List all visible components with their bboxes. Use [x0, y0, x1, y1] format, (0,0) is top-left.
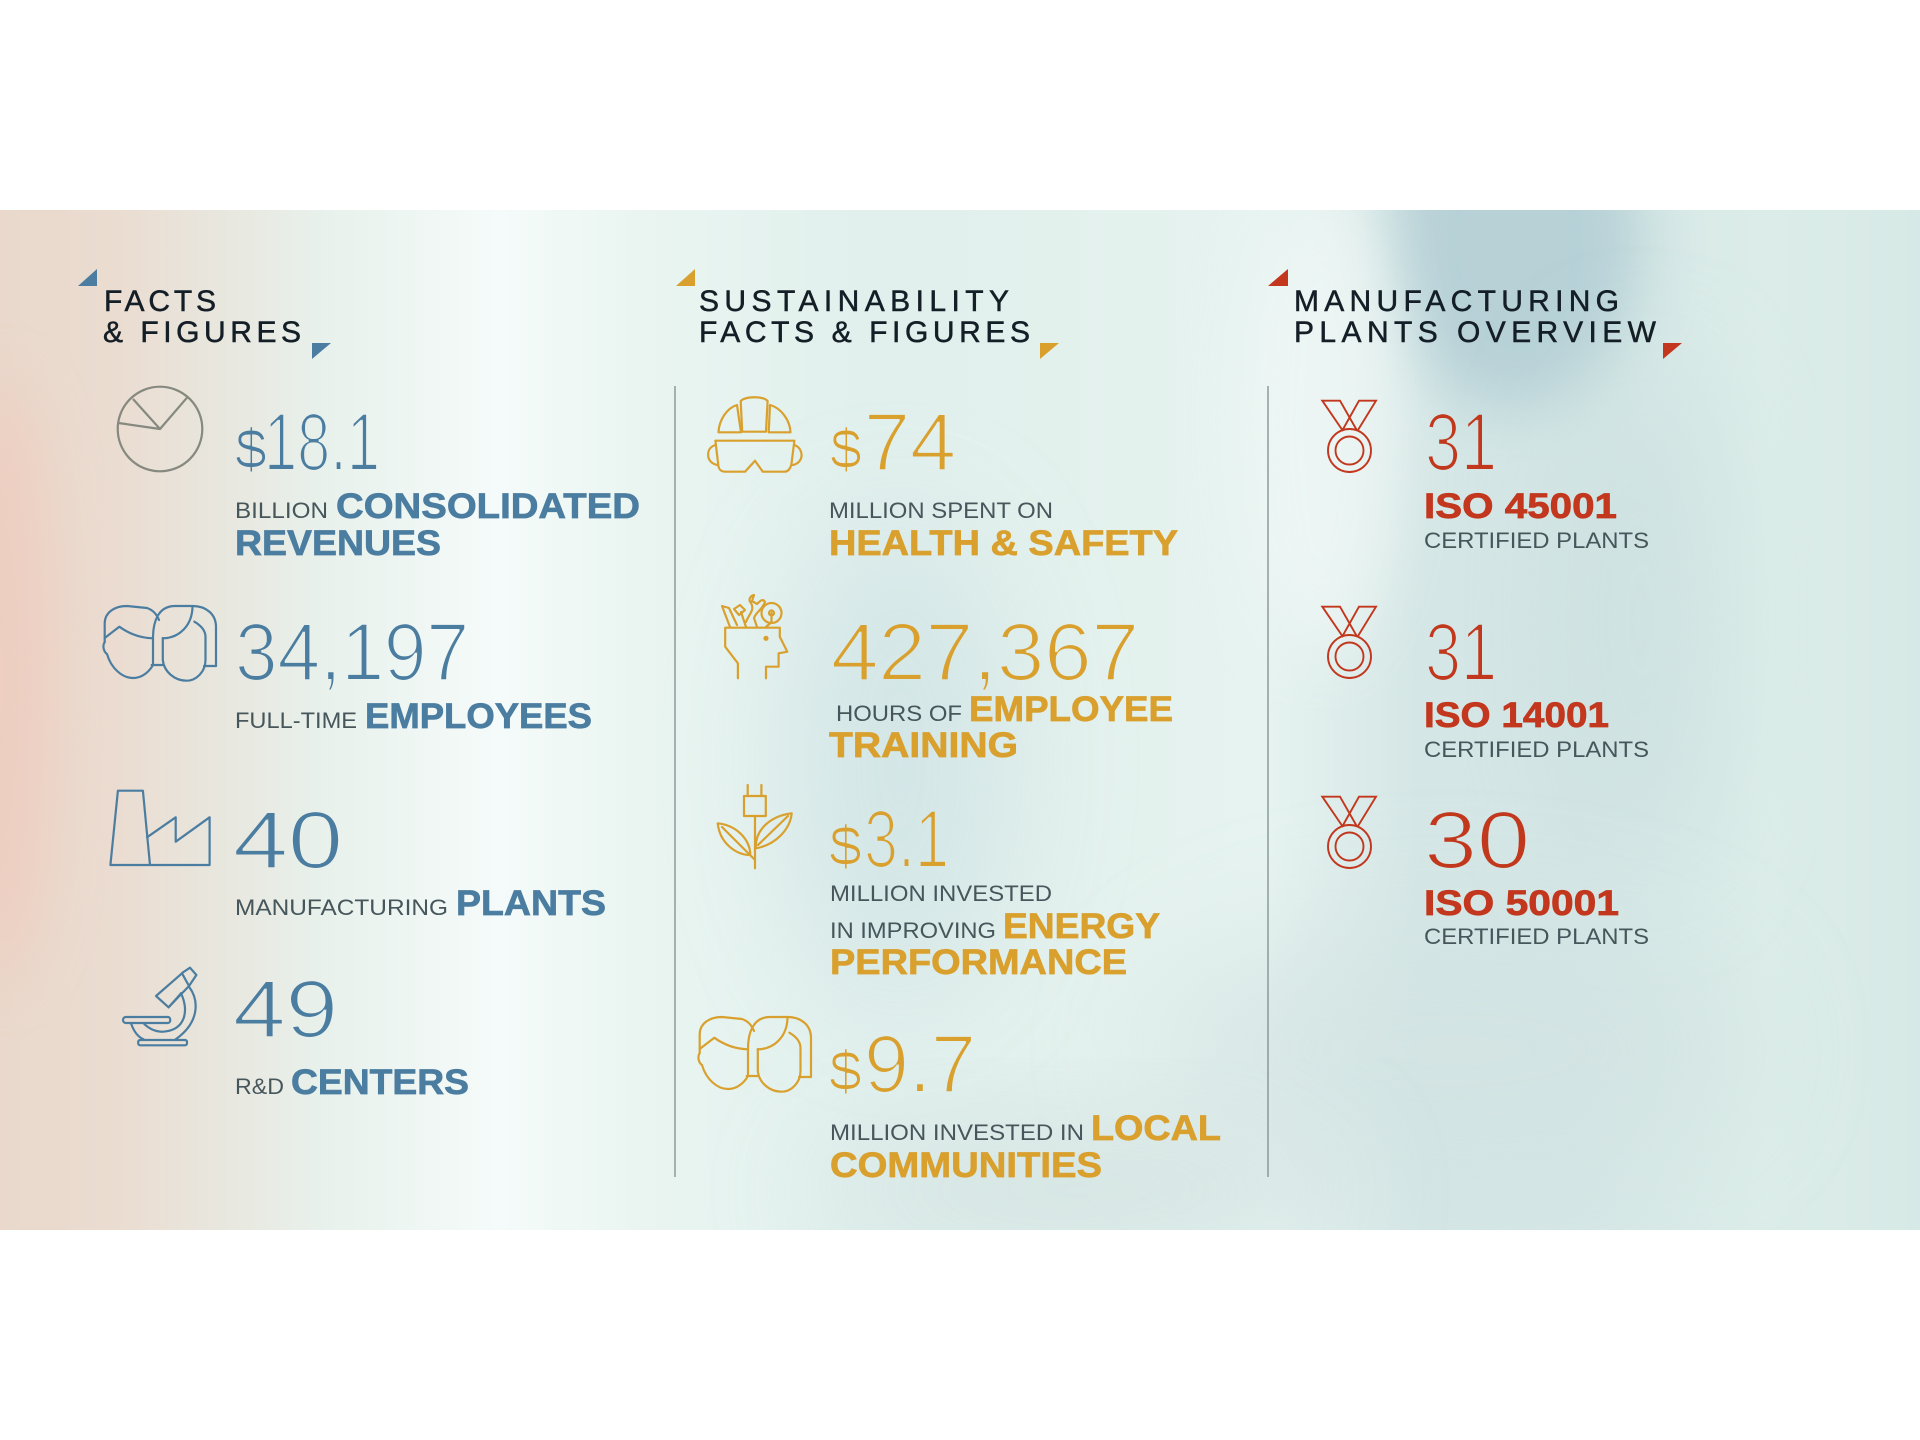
stat: energy performance: PERFORMANCE: [830, 943, 1127, 982]
stat: health and safety: [829, 397, 1178, 563]
heading: facts and figures: & FIGURES: [103, 316, 301, 349]
icon: plant with plug: [718, 785, 792, 868]
heading: facts and figures: FACTS: [104, 285, 216, 318]
stat: revenues: BILLION: [235, 498, 328, 523]
stat: energy performance: IN IMPROVING: [830, 918, 996, 943]
stat: ISO 50001: CERTIFIED PLANTS: [1424, 924, 1649, 949]
stat: employee training: [829, 607, 1173, 765]
stat: revenues: [235, 397, 640, 563]
icon: employees faces: [103, 606, 216, 681]
divider: column one and two: [674, 386, 676, 1177]
stat: local communities: $: [829, 1040, 862, 1102]
heading: manufacturing plants overview: MANUFACTURING: [1294, 285, 1619, 318]
stat: energy performance: MILLION INVESTED: [830, 881, 1052, 906]
stat: plants: MANUFACTURING: [235, 895, 448, 920]
stat: health and safety: 74: [864, 397, 956, 488]
heading: manufacturing plants overview: PLANTS OVERVIEW: [1294, 316, 1657, 349]
stat: employees: [235, 607, 592, 736]
stat: revenues: CONSOLIDATED: [336, 487, 640, 526]
stat: ISO 45001: CERTIFIED PLANTS: [1424, 528, 1649, 553]
stat: employees: 34,197: [235, 607, 469, 698]
stat: research centers: [233, 964, 469, 1102]
icon: pie chart: [118, 387, 202, 471]
icon: head with tools: [722, 595, 787, 678]
icon: community faces: [698, 1017, 811, 1092]
heading: sustainability: [676, 269, 1059, 359]
stat: local communities: 9.7: [864, 1019, 976, 1110]
stat: revenues: 18.1: [264, 397, 380, 488]
stat: research centers: R&D: [235, 1074, 284, 1099]
icon: medal one: [1322, 401, 1376, 472]
panel: manufacturing plants overview: [1268, 269, 1682, 949]
background band: [0, 210, 1920, 1230]
stat: energy performance: 3.1: [864, 794, 949, 885]
stat: local communities: [829, 1019, 1221, 1185]
stat: ISO 45001: ISO 45001: [1424, 487, 1617, 526]
stat: local communities: LOCAL: [1091, 1109, 1221, 1148]
stat: ISO 14001: ISO 14001: [1424, 696, 1609, 735]
stat: revenues: $: [235, 418, 267, 480]
stat: employee training: HOURS OF: [836, 701, 962, 726]
heading: sustainability: FACTS & FIGURES: [699, 316, 1030, 349]
stat: employees: EMPLOYEES: [365, 697, 592, 736]
stat: energy performance: [829, 794, 1160, 982]
stat: local communities: MILLION INVESTED IN: [830, 1120, 1084, 1145]
heading: sustainability: SUSTAINABILITY: [699, 285, 1009, 318]
stat: ISO 14001: 31: [1425, 607, 1497, 698]
icon: medal three: [1322, 797, 1376, 868]
divider: column two and three: [1267, 386, 1269, 1177]
stat: employee training: EMPLOYEE: [969, 690, 1173, 729]
stat: plants: 40: [233, 795, 343, 886]
stat: health and safety: MILLION SPENT ON: [829, 498, 1053, 523]
stat: ISO 50001: 30: [1424, 795, 1530, 886]
stat: health and safety: HEALTH & SAFETY: [829, 524, 1178, 563]
icon: microscope: [123, 968, 196, 1045]
stat: energy performance: ENERGY: [1003, 907, 1160, 946]
heading: manufacturing plants overview: [1268, 269, 1682, 359]
stat: ISO 45001: [1424, 397, 1649, 553]
stat: employees: FULL-TIME: [235, 708, 357, 733]
stat: ISO 14001: CERTIFIED PLANTS: [1424, 737, 1649, 762]
stat: research centers: CENTERS: [291, 1063, 469, 1102]
stat: ISO 50001: ISO 50001: [1424, 884, 1619, 923]
icon: medal two: [1322, 607, 1376, 678]
stat: local communities: COMMUNITIES: [830, 1146, 1102, 1185]
icon: helmet and goggles: [708, 397, 802, 472]
stat: plants: [233, 795, 606, 923]
heading: facts and figures: [78, 269, 331, 359]
stat: energy performance: $: [829, 815, 862, 877]
stat: ISO 45001: 31: [1425, 397, 1497, 488]
stat: ISO 14001: [1424, 607, 1649, 762]
stat: plants: PLANTS: [456, 884, 606, 923]
panel: sustainability facts and figures: [676, 269, 1221, 1185]
stat: ISO 50001: [1424, 795, 1649, 949]
stat: employee training: 427,367: [831, 607, 1139, 698]
stat: health and safety: $: [830, 418, 862, 480]
icon: factory: [110, 791, 210, 865]
stat: research centers: 49: [233, 964, 338, 1055]
stat: employee training: TRAINING: [829, 726, 1018, 765]
stat: revenues: REVENUES: [235, 524, 441, 563]
panel: facts and figures: [78, 269, 640, 1102]
